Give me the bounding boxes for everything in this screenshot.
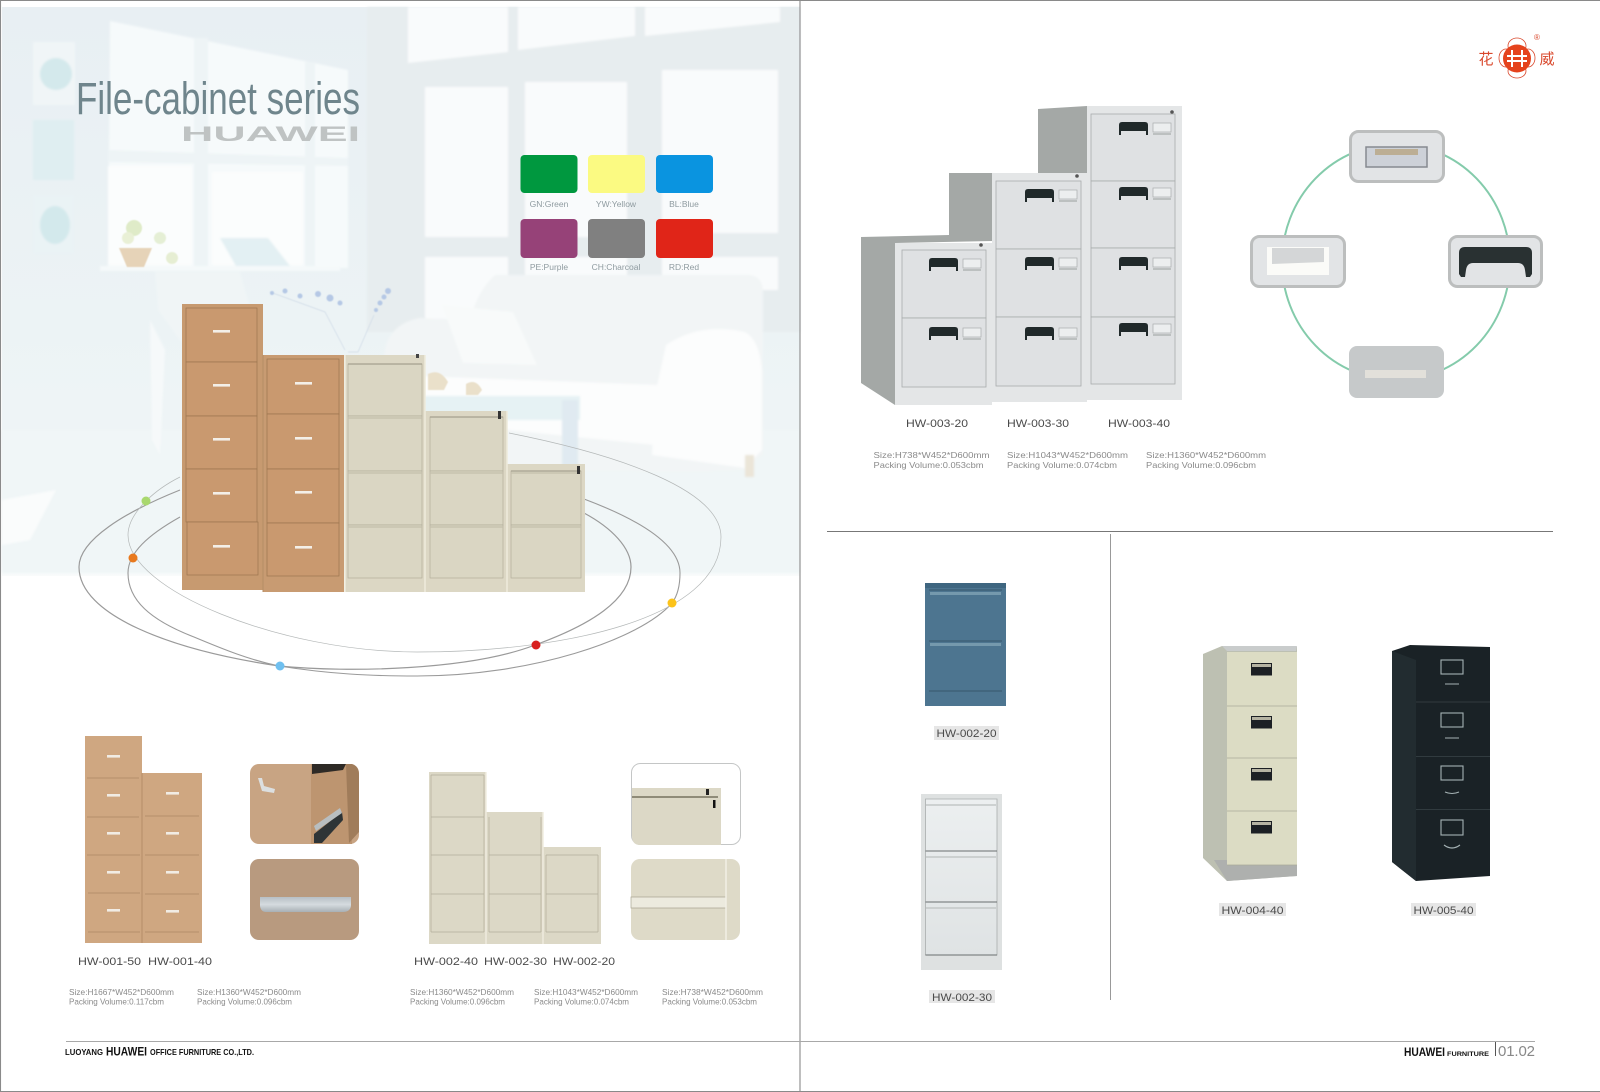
detail photo: cream cabinet lock — [632, 764, 740, 845]
detail photo: silver handle — [250, 859, 359, 940]
colour swatches: GN:Green — [530, 199, 569, 209]
handle card: bottom — [1349, 346, 1444, 398]
title: File-cabinet series — [76, 73, 360, 124]
footer company name: LUOYANG — [65, 1047, 103, 1057]
handle card: left — [1252, 236, 1344, 286]
specifications: HW-003: Packing Volume:0.053cbm — [874, 460, 984, 470]
colour swatches: PE:Purple — [530, 262, 568, 272]
hero cream cabinets — [345, 354, 585, 592]
specifications: left page: Size:H1043*W452*D600mm — [534, 987, 638, 997]
footer company name: HUAWEI — [106, 1044, 147, 1058]
detail photo: cream drawer edge — [631, 859, 740, 940]
detail photo: open drawer rail — [250, 764, 359, 844]
background photo: white living room — [2, 7, 800, 576]
logo: 威 — [1539, 51, 1555, 68]
model labels: HW-003: HW-003-20 — [906, 418, 968, 430]
model labels: HW-003 — [906, 418, 1170, 430]
handle card: top — [1350, 132, 1444, 182]
specifications: HW-003: Size:H1360*W452*D600mm — [1146, 450, 1266, 460]
label: HW-005-40: HW-005-40 — [1414, 905, 1474, 917]
footer company name — [65, 1044, 254, 1058]
model: HW-004-40 cream cabinet — [1203, 646, 1297, 881]
specifications: HW-003 — [874, 450, 1266, 470]
model labels: HW-003: HW-003-40 — [1108, 418, 1170, 430]
model: HW-005-40 black cabinet — [1392, 645, 1490, 881]
footer company name: OFFICE FURNITURE CO.,LTD. — [150, 1047, 254, 1057]
specifications: left page: Packing Volume:0.074cbm — [534, 996, 629, 1006]
footer brand and page number — [1404, 1042, 1535, 1060]
handle card: right — [1450, 236, 1542, 286]
specifications: left page: Packing Volume:0.096cbm — [197, 996, 292, 1006]
model labels: HW-003: HW-003-30 — [1007, 418, 1069, 430]
specifications: left page: Packing Volume:0.117cbm — [69, 996, 164, 1006]
brand watermark: HUAWEI — [181, 123, 360, 146]
hero orange cabinets — [182, 304, 344, 592]
ring colour dots — [128, 496, 676, 670]
label: HW-002-20: HW-002-20 — [936, 728, 996, 740]
specifications: HW-003: Packing Volume:0.096cbm — [1146, 460, 1256, 470]
specifications: left page: Size:H1667*W452*D600mm — [69, 987, 174, 997]
model labels: left page: HW-002-20 — [553, 956, 615, 968]
specifications: left page: Packing Volume:0.096cbm — [410, 996, 505, 1006]
sofa — [384, 275, 763, 472]
colour swatches: YW:Yellow — [596, 199, 637, 209]
wall window — [108, 21, 348, 268]
product: HW-001 orange cabinets — [85, 736, 202, 943]
colour swatches — [520, 155, 713, 272]
model labels: left page: HW-002-30 — [484, 956, 547, 968]
footer brand and page number: HUAWEI — [1404, 1045, 1445, 1059]
decorative orbit rings — [79, 433, 721, 676]
logo — [1478, 33, 1555, 78]
specifications: left page: Size:H1360*W452*D600mm — [410, 987, 514, 997]
specifications: HW-003: Size:H738*W452*D600mm — [874, 450, 990, 460]
product: HW-002 cream cabinets — [429, 772, 601, 944]
label: HW-002-30: HW-002-30 — [932, 992, 992, 1004]
model labels: left page: HW-001-50 — [78, 956, 141, 968]
product: HW-003 grey stepped cabinets — [861, 106, 1182, 405]
chair — [155, 272, 258, 370]
colour swatches: CH:Charcoal — [592, 262, 640, 272]
model: HW-002-30 grey cabinet — [921, 794, 1002, 970]
colour swatches: BL:Blue — [669, 199, 699, 209]
footer brand and page number: 01.02 — [1498, 1043, 1535, 1060]
model labels: left page — [78, 956, 615, 968]
specifications: HW-003: Size:H1043*W452*D600mm — [1007, 450, 1128, 460]
specifications: left page: Packing Volume:0.053cbm — [662, 996, 757, 1006]
label: HW-004-40: HW-004-40 — [1222, 905, 1284, 917]
handle options ring — [1282, 144, 1510, 380]
logo: ® — [1534, 33, 1540, 42]
specifications: left page: Size:H1360*W452*D600mm — [197, 987, 301, 997]
logo: 花 — [1478, 51, 1494, 68]
model: HW-002-20 blue cabinet — [925, 583, 1006, 706]
specifications: HW-003: Packing Volume:0.074cbm — [1007, 460, 1117, 470]
specifications: left page — [69, 987, 763, 1006]
colour swatches: RD:Red — [669, 262, 699, 272]
model labels: left page: HW-002-40 — [414, 956, 478, 968]
footer brand and page number: FURNITURE — [1447, 1051, 1490, 1058]
wall pictures — [33, 42, 75, 254]
specifications: left page: Size:H738*W452*D600mm — [662, 987, 763, 997]
model labels: left page: HW-001-40 — [148, 956, 212, 968]
